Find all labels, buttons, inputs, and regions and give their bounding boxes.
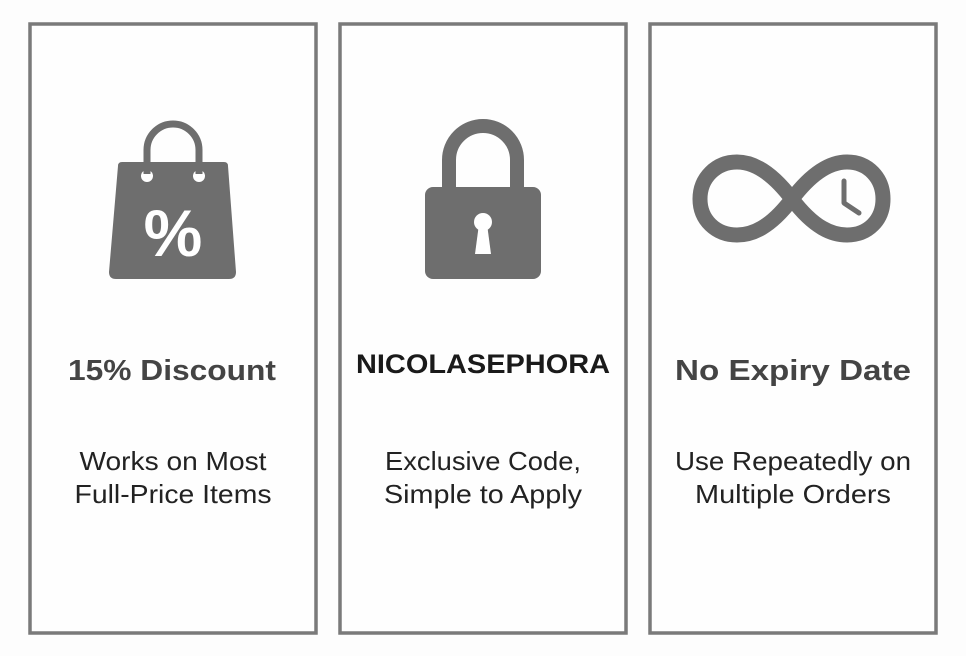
panel: discount: [30, 24, 316, 633]
text: description: Simple to Apply: [384, 479, 582, 509]
text: description: Exclusive Code,: [385, 446, 581, 476]
text: description: [74, 446, 272, 509]
icon: shopping bag with percent: %: [144, 196, 202, 270]
text: description: Multiple Orders: [695, 479, 891, 509]
panel: code: [340, 24, 626, 633]
icon: infinity with clock: [700, 162, 883, 235]
heading: NICOLASEPHORA: NICOLASEPHORA: [356, 349, 610, 379]
panel: no expiry: [650, 24, 936, 633]
heading: No Expiry Date: No Expiry Date: [675, 355, 911, 387]
text: description: Works on Most: [80, 446, 267, 476]
heading: 15% Discount: 15% Discount: [68, 355, 276, 387]
icon: shopping bag with percent: [109, 124, 236, 279]
text: description: [384, 446, 582, 509]
icon: padlock: [425, 126, 541, 279]
text: description: Use Repeatedly on: [675, 446, 911, 476]
text: description: [675, 446, 911, 509]
text: description: Full-Price Items: [74, 479, 272, 509]
